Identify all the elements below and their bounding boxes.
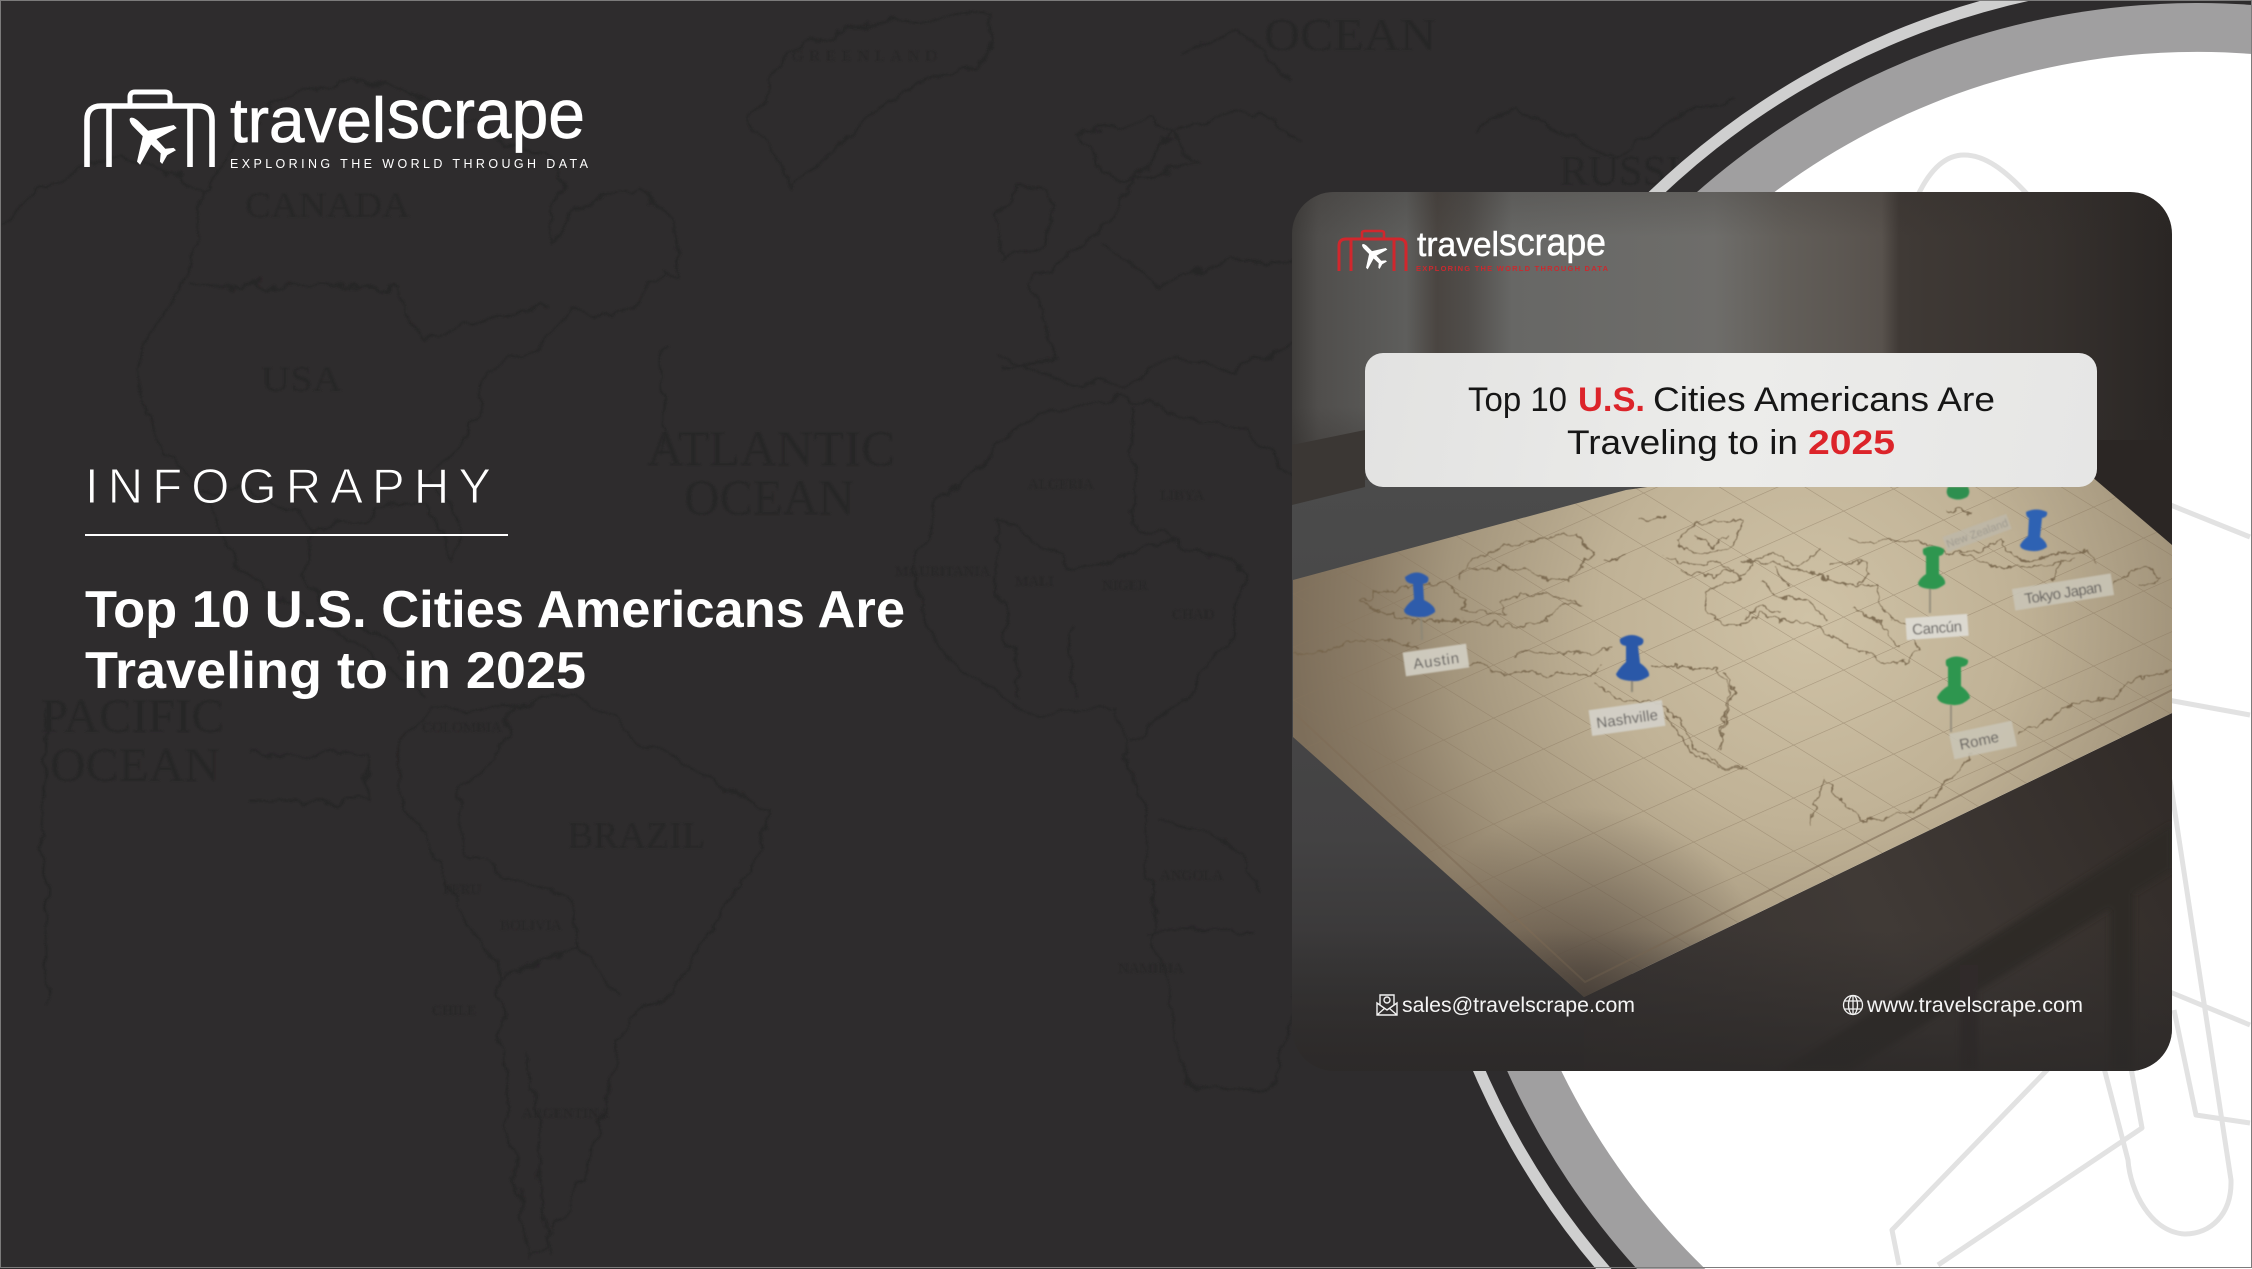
- label: Tokyo Japan: [2012, 573, 2114, 611]
- table top: [1292, 430, 2172, 1071]
- map place names: MALI: [1015, 574, 1053, 590]
- wordmark: travel: [230, 86, 386, 156]
- map place names: MAURITANIA: [895, 564, 991, 580]
- map labels: [1403, 514, 2114, 759]
- card title line 1: Cities Americans Are: [1653, 381, 1995, 419]
- pin: blue Tokyo: [2020, 510, 2047, 551]
- label: New Zealand faint: New Zealand: [1945, 517, 2010, 551]
- card title line 2: 2025: [1808, 424, 1895, 462]
- map place names: OCEAN: [50, 739, 220, 792]
- map place names: PERU: [443, 882, 482, 898]
- panel: cover card photo: [1292, 192, 2172, 1071]
- map place names: OCEAN: [1264, 9, 1436, 60]
- icon: globe: [1844, 996, 1862, 1014]
- map place names: PACIFIC: [41, 690, 224, 743]
- decorative circle with rings: [1408, 0, 2252, 1269]
- map place names: ALGERIA: [1028, 477, 1094, 493]
- divider rule: [85, 534, 508, 536]
- map place names: NAMIBIA: [1118, 961, 1184, 977]
- wordmark: [230, 75, 585, 156]
- pin: blue Austin: [1404, 572, 1435, 640]
- map place names: CANADA: [245, 185, 410, 225]
- label: Rome: [1949, 721, 2017, 759]
- label: Rome: Rome: [1958, 729, 2001, 754]
- infography label: INFOGRAPHY: [85, 460, 491, 514]
- main title: [85, 581, 905, 700]
- map place names: OCEAN: [684, 469, 854, 525]
- wordmark: travel: [1417, 226, 1499, 264]
- map place names: CHAD: [1172, 607, 1215, 623]
- map place names: CHILE: [432, 1003, 476, 1019]
- main title: Top 10 U.S. Cities Americans Are: [85, 581, 905, 639]
- photo lower fade: [1292, 930, 2172, 1071]
- map place names: ANGOLA: [1160, 868, 1223, 884]
- panel: card title box: [1365, 353, 2097, 487]
- label: Cancún: Cancún: [1912, 618, 1963, 639]
- world map watermark: [0, 9, 1733, 1258]
- label: Cancún: [1905, 614, 1969, 640]
- card title line 2: Traveling to in: [1567, 424, 1798, 462]
- tagline: EXPLORING THE WORLD THROUGH DATA: [230, 157, 589, 171]
- wordmark: scrape: [387, 75, 585, 153]
- icon: suitcase with plane: [87, 92, 212, 175]
- map place names: RUSSIA: [1560, 149, 1712, 195]
- vintage map sheet: [1292, 460, 2172, 1020]
- map outlines: [0, 15, 1733, 1258]
- icon: envelope: [1377, 995, 1397, 1015]
- label: Nashville: Nashville: [1595, 707, 1659, 732]
- map place names: BOLIVIA: [500, 918, 562, 934]
- card title line 1: Top 10: [1468, 381, 1567, 419]
- tagline: EXPLORING THE WORLD THROUGH DATA: [1416, 264, 1609, 273]
- map place names: [41, 9, 1712, 1122]
- contact: email: sales@travelscrape.com: [1402, 994, 1635, 1017]
- main title: Traveling to in 2025: [85, 642, 586, 700]
- map place names: LIBYA: [1160, 488, 1204, 504]
- map place names: NIGER: [1102, 578, 1148, 594]
- map place names: GREENLAND: [792, 48, 937, 65]
- pin: green behind panel: [1947, 487, 1969, 500]
- pin: green Rome: [1937, 656, 1970, 732]
- wall with curtains: [1292, 192, 2172, 492]
- map place names: COLOMBIA: [422, 720, 502, 736]
- logo: travelscrape red on card: [1339, 222, 1609, 275]
- pin: blue Nashville: [1616, 635, 1649, 692]
- map place names: ARGENTINA: [522, 1106, 610, 1122]
- card title line 1: [1468, 381, 1995, 419]
- card title line 2: [1567, 424, 1895, 462]
- icon: red suitcase with plane: [1339, 231, 1406, 275]
- map place names: ATLANTIC: [647, 420, 895, 476]
- card title line 1: U.S.: [1578, 381, 1645, 419]
- label: Austin: Austin: [1412, 650, 1460, 673]
- label: Austin: [1403, 644, 1469, 676]
- wordmark: [1417, 222, 1606, 264]
- continents: [1293, 510, 2172, 827]
- wordmark: scrape: [1499, 222, 1606, 264]
- map place names: BRAZIL: [568, 815, 705, 857]
- label: Tokyo Japan: Tokyo Japan: [2023, 579, 2103, 608]
- pins: [1404, 487, 2047, 732]
- logo: travelscrape white: [87, 75, 589, 175]
- contact: website: www.travelscrape.com: [1866, 994, 2083, 1017]
- label: Nashville: [1589, 700, 1665, 736]
- ghost plane outline: [1892, 155, 2250, 1265]
- pin: green Cancún: [1918, 546, 1945, 613]
- map place names: USA: [261, 359, 342, 399]
